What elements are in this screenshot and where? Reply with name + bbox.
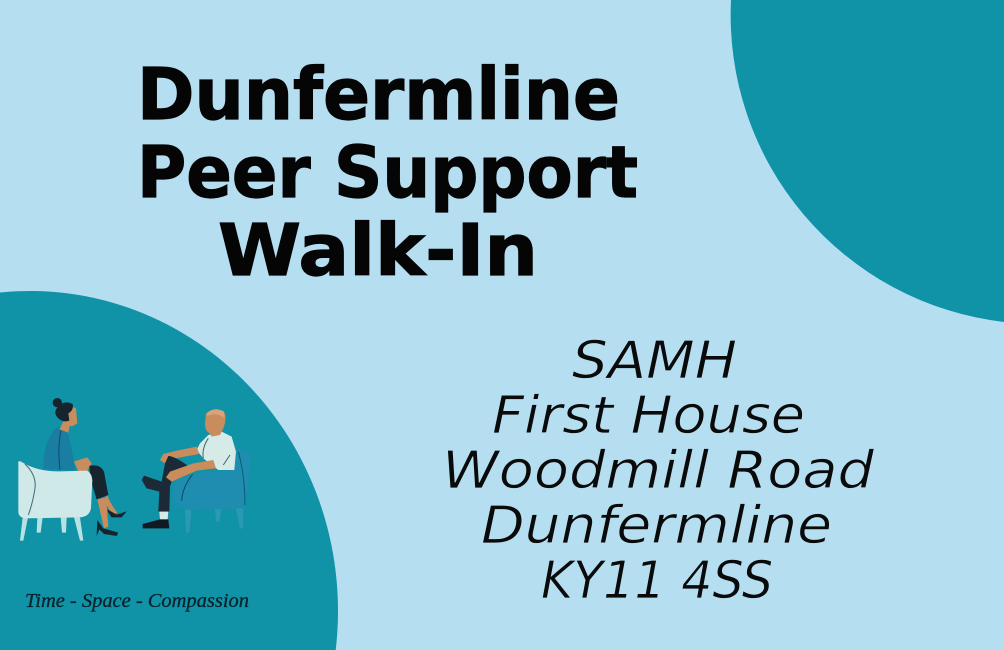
woman in armchair [18, 398, 127, 541]
address: KY11 4SS [541, 551, 773, 611]
title: Peer Support [137, 131, 638, 214]
address: First House [492, 386, 805, 446]
title [137, 53, 638, 292]
tagline: Time - Space - Compassion [25, 590, 249, 612]
man in armchair [142, 409, 251, 533]
address: SAMH [572, 331, 737, 391]
address [442, 331, 875, 611]
illustration: two people talking in armchairs [18, 398, 251, 541]
top right teal circle [731, 0, 1004, 322]
address: Dunfermline [481, 496, 832, 556]
title: Dunfermline [137, 53, 620, 136]
address: Woodmill Road [442, 441, 875, 501]
bottom left teal circle [0, 291, 338, 650]
title: Walk-In [218, 209, 538, 292]
